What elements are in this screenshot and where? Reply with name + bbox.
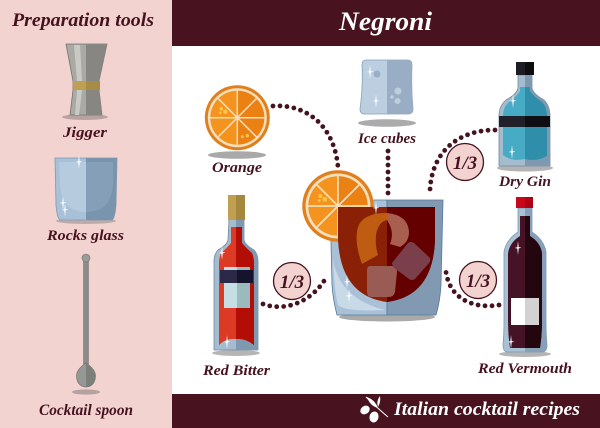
label: rocks glass: Rocks glass (46, 228, 124, 244)
icon: red bitter bottle (212, 195, 260, 356)
icon: ice cube (358, 60, 416, 127)
icon: dry gin bottle (497, 62, 553, 172)
garnish: orange slice (302, 170, 374, 242)
icon: red vermouth bottle (499, 197, 551, 357)
label: jigger: Jigger (62, 125, 107, 141)
dotted arrow: ice to glass (386, 151, 390, 195)
icon: rocks glass (55, 155, 117, 224)
badge: bitter ratio: 1/3 (280, 272, 304, 293)
label: ice cubes: Ice cubes (357, 131, 416, 147)
badge: gin ratio (446, 144, 484, 180)
label: cocktail spoon: Cocktail spoon (39, 402, 133, 419)
label: dry gin: Dry Gin (498, 174, 551, 190)
icon: negroni glass (302, 170, 443, 322)
badge: gin ratio: 1/3 (453, 153, 477, 174)
icon: olive branch (359, 396, 388, 423)
header bar (172, 0, 600, 46)
dotted arrow: gin to glass (430, 130, 495, 190)
badge: vermouth ratio (460, 262, 496, 298)
icon: cocktail spoon (72, 254, 100, 395)
label: orange: Orange (212, 160, 262, 176)
footer text: Italian cocktail recipes (393, 399, 580, 420)
label: red bitter: Red Bitter (202, 363, 270, 379)
badge: vermouth ratio: 1/3 (466, 271, 490, 292)
dotted arrow: bitter to glass (263, 281, 324, 307)
heading: preparation tools: Preparation tools (11, 11, 154, 31)
footer bar (172, 394, 600, 428)
dotted arrow: vermouth to glass (446, 272, 499, 306)
badge: bitter ratio (274, 262, 310, 300)
dotted arrow: orange to glass (273, 106, 338, 167)
label: red vermouth: Red Vermouth (477, 361, 572, 377)
icon: orange (205, 85, 270, 159)
panel: preparation tools (0, 0, 172, 428)
title: Negroni (338, 7, 433, 36)
icon: jigger (62, 44, 108, 120)
main white panel (172, 46, 600, 394)
